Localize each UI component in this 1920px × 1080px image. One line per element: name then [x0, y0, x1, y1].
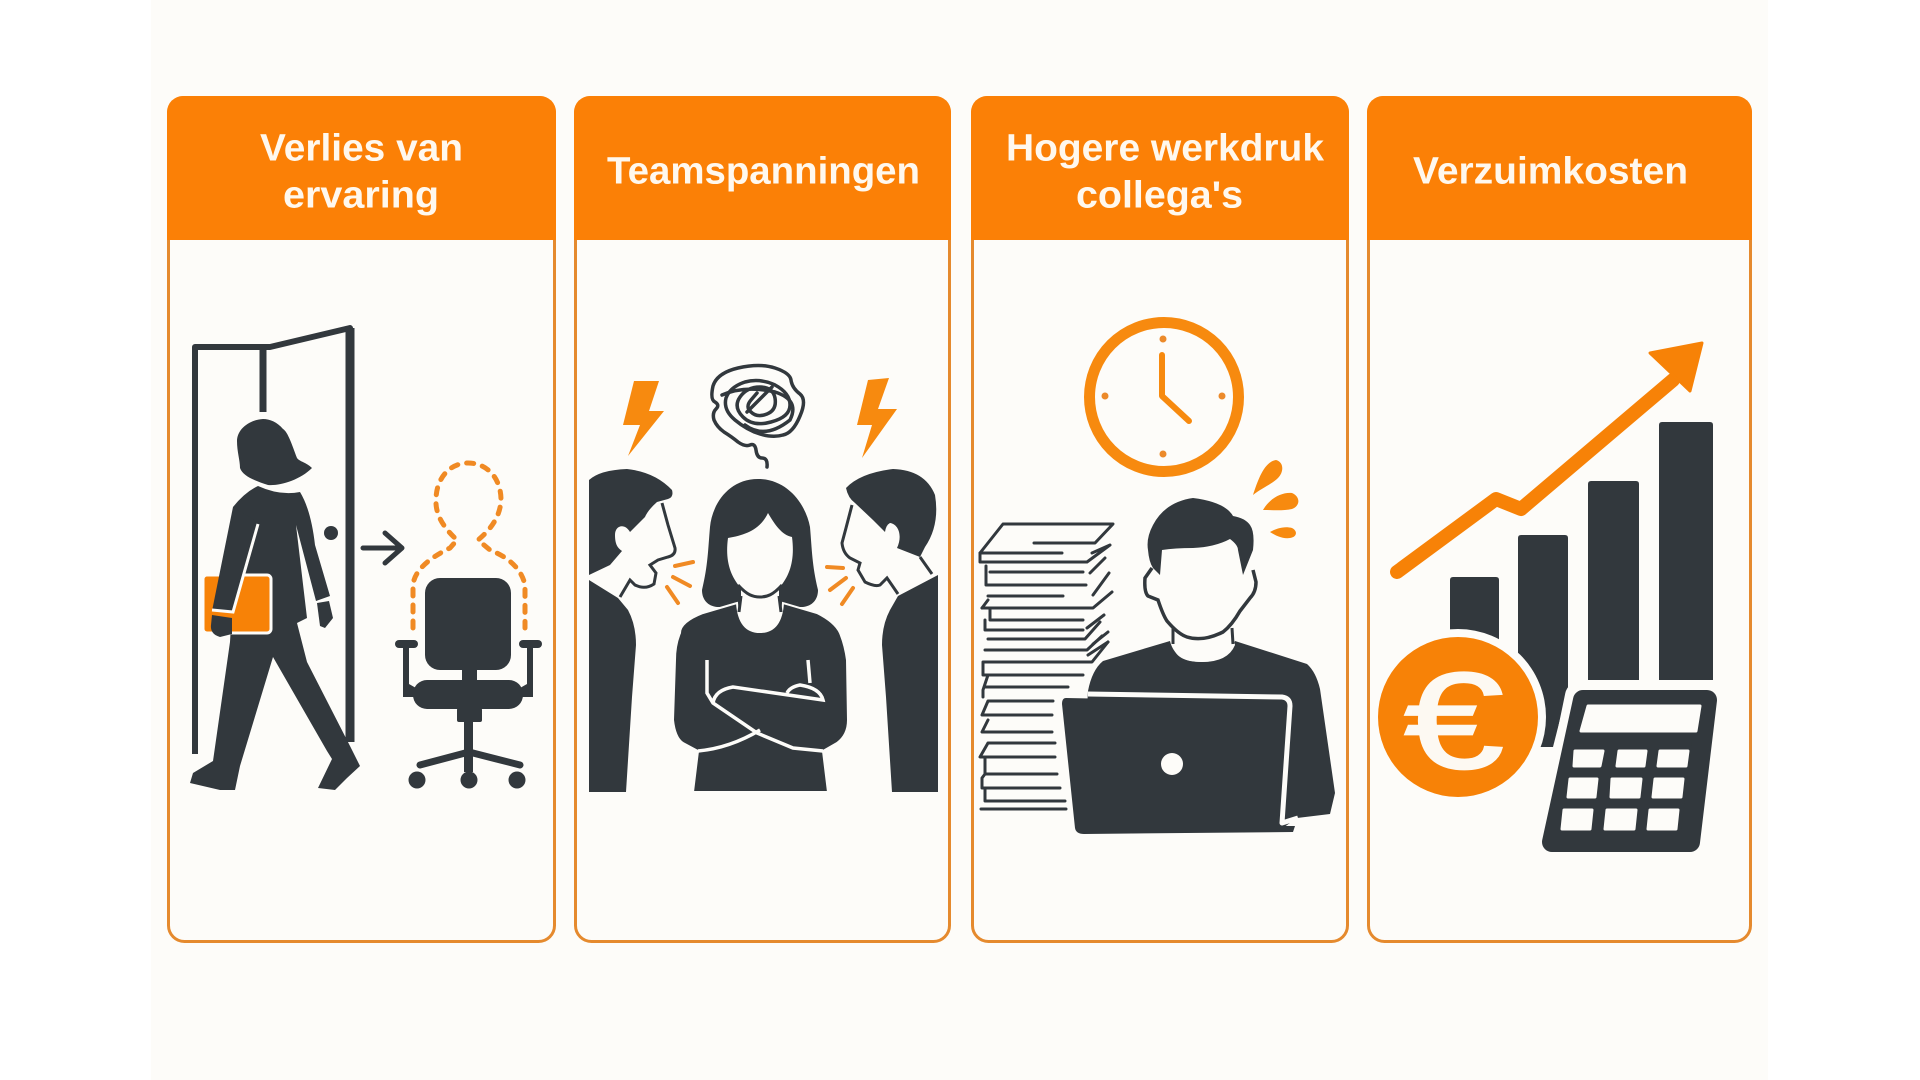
icon: stress droplets — [1253, 460, 1298, 538]
header: Hogere werkdruk collega's: Hogere werkdruk — [1006, 128, 1325, 170]
header: Verzuimkosten: Verzuimkosten — [1413, 150, 1688, 192]
arrow — [363, 533, 402, 563]
icon: man at laptop — [1062, 498, 1335, 834]
icon: right arguing man — [842, 469, 938, 792]
icon: empty office chair — [395, 578, 542, 788]
header: Teamspanningen — [574, 96, 951, 240]
header: Hogere werkdruk collega's — [971, 96, 1349, 240]
panel: Verzuimkosten — [1367, 96, 1752, 942]
icon: dashed missing person outline — [413, 463, 525, 628]
chart: rising bars — [1450, 422, 1713, 747]
header: Hogere werkdruk collega's: collega's — [1076, 174, 1243, 216]
panel: Hogere werkdruk collega's — [971, 96, 1349, 942]
icon: euro coin — [1370, 629, 1546, 805]
panel: Verlies van ervaring — [167, 96, 556, 942]
icon: left arguing man — [589, 469, 675, 792]
header: Verlies van ervaring: Verlies van — [260, 128, 463, 170]
icon: speech marks left — [667, 562, 693, 603]
header: Verzuimkosten — [1367, 96, 1752, 240]
icon: speech marks right — [827, 567, 853, 604]
header: Teamspanningen: Teamspanningen — [607, 150, 920, 192]
icon: right lightning bolt — [857, 378, 897, 458]
panel: Teamspanningen — [574, 96, 951, 942]
header: Verlies van ervaring — [167, 96, 556, 240]
icon: stack of papers — [980, 524, 1113, 809]
icon: clock — [1090, 322, 1238, 472]
icon: departing person with folder — [190, 419, 360, 790]
icon: calculator — [1548, 696, 1711, 846]
icon: euro coin: € — [1404, 645, 1504, 798]
arrow: rising trend — [1397, 343, 1702, 572]
icon: tangled scribble — [712, 366, 804, 467]
icon: open door — [195, 328, 350, 754]
header: Verlies van ervaring: ervaring — [283, 174, 439, 216]
icon: central woman with crossed arms — [673, 479, 848, 792]
icon: left lightning bolt — [623, 381, 664, 456]
